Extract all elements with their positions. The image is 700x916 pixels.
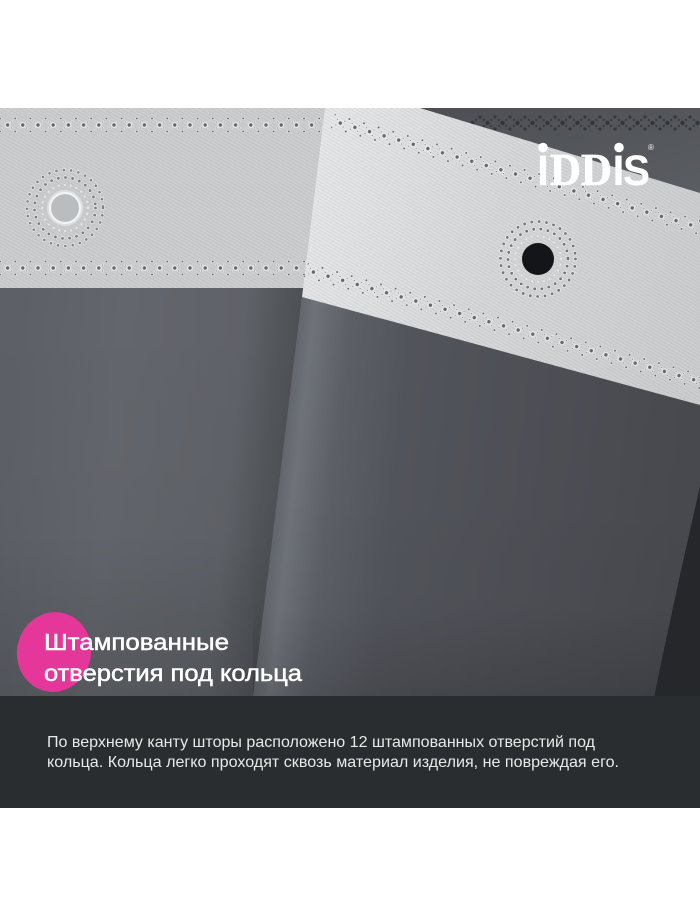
logo: IDDIS: I (612, 147, 624, 195)
right eyelet stamped hole (500, 222, 576, 296)
heading: отверстия под кольца (44, 660, 302, 686)
left curtain white top band (0, 108, 330, 288)
right band lower perforated line (303, 260, 700, 394)
description text: По верхнему канту шторы расположено 12 штампованных отверстий под (47, 734, 596, 751)
description text: кольца. Кольца легко проходят сквозь материал изделия, не повреждая его. (47, 754, 619, 771)
logo: IDDIS: DD (550, 145, 612, 195)
heading (44, 629, 302, 686)
logo: IDDIS: S (623, 147, 650, 195)
right curtain white top band (302, 108, 700, 405)
logo: IDDIS: ® (648, 143, 654, 152)
left band lower perforated line (0, 258, 310, 278)
dark gap at right edge (654, 486, 700, 696)
panel: description (0, 696, 700, 808)
background fabric behind the curtains (320, 108, 700, 228)
left curtain grey body (0, 288, 340, 696)
accent: pink blob behind heading (9, 605, 99, 699)
right curtain grey body (253, 296, 700, 696)
photo: shower curtain close-up (0, 108, 700, 696)
logo: IDDIS: I (537, 147, 549, 195)
heading: Штампованные (44, 629, 229, 655)
right band upper perforated line (330, 111, 700, 242)
description text (47, 734, 619, 771)
left band upper perforated line (0, 115, 330, 135)
left eyelet stamped hole (27, 170, 103, 246)
logo: IDDIS (537, 143, 654, 195)
